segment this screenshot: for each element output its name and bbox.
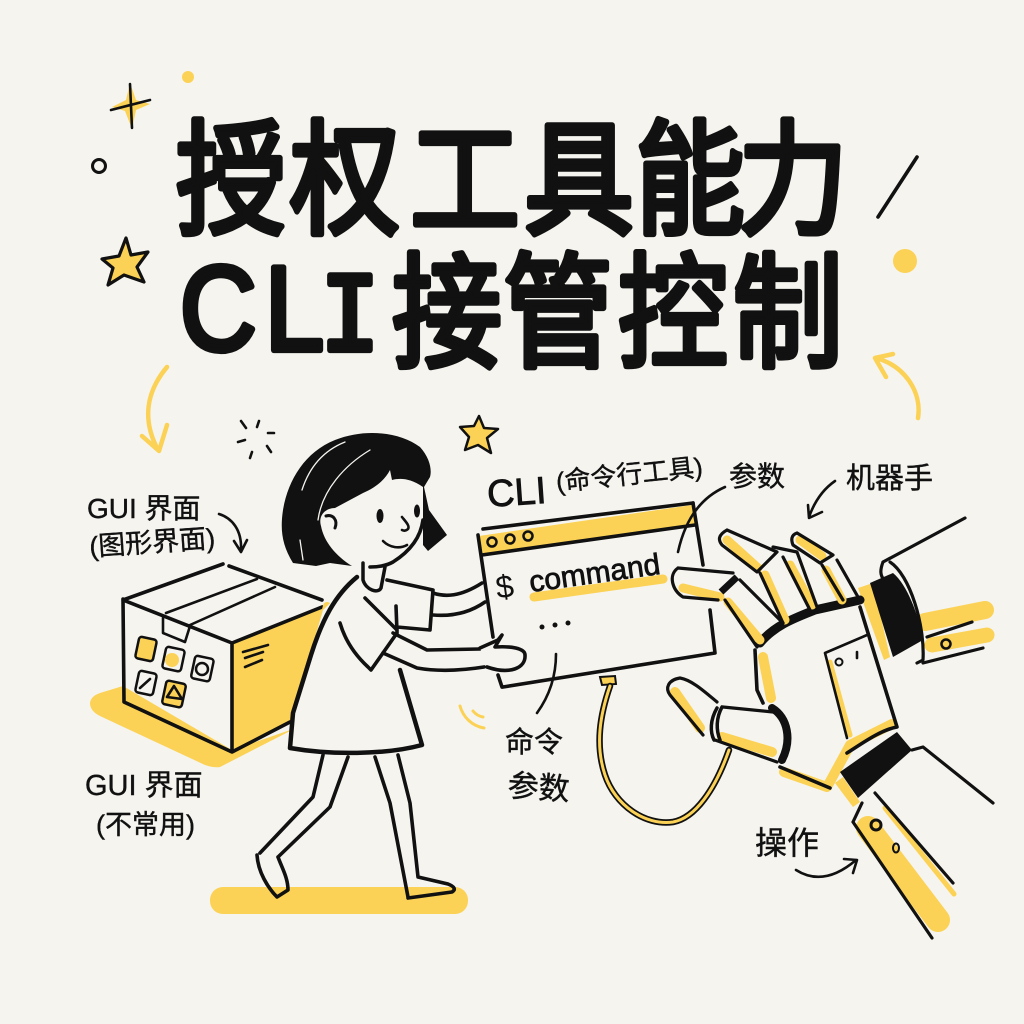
command text — [493, 547, 662, 606]
ground shadow — [210, 887, 468, 914]
label: GUI interface rarely used: GUI 界面 — [85, 770, 203, 802]
leader: command — [537, 654, 556, 713]
title line 2 — [180, 242, 843, 385]
label: GUI interface rarely used — [85, 770, 203, 840]
label: GUI interface top — [87, 493, 216, 562]
command text: $ — [493, 568, 516, 606]
arrow: yellow curved left — [142, 367, 167, 451]
label: CLI command line tool: CLI — [486, 470, 548, 516]
title line 2: 接管控制 — [392, 245, 843, 383]
title line 2: I — [320, 257, 380, 385]
face — [326, 504, 423, 567]
box: GUI app package — [90, 564, 327, 767]
icon: sparks — [238, 421, 274, 458]
box right face — [232, 605, 327, 752]
dress yellow edge — [296, 606, 327, 722]
palm — [755, 607, 897, 788]
icon: small ring — [92, 160, 106, 172]
motion marks — [460, 706, 484, 728]
label: command parameters — [505, 726, 571, 807]
icon: star left — [102, 238, 148, 285]
title bar — [479, 505, 697, 555]
app icons — [135, 636, 214, 708]
label: GUI interface top: GUI 界面 — [87, 493, 201, 524]
arrow: operate — [796, 859, 857, 877]
title line 1: 授权工具能力 — [176, 112, 848, 250]
terminal body — [478, 503, 715, 687]
label: command parameters: 参数 — [507, 768, 571, 807]
thumb — [668, 678, 787, 763]
arrow: robot hand — [808, 481, 835, 518]
hair highlights — [300, 442, 370, 560]
girl lower arm and hand — [383, 633, 525, 672]
title line 2: CL — [180, 242, 324, 376]
icon: yellow dot right — [893, 249, 917, 273]
connector — [600, 676, 616, 685]
upper arm — [433, 583, 485, 615]
upper sleeve — [858, 518, 987, 663]
cable — [600, 686, 729, 822]
command highlight — [534, 579, 663, 597]
icon: sparkle top left — [111, 83, 150, 129]
title — [176, 112, 848, 385]
label: parameters top: 参数 — [729, 461, 785, 492]
label: command parameters: 命令 — [505, 726, 563, 759]
CLI terminal window — [478, 503, 715, 687]
label: GUI interface top: (图形界面) — [88, 523, 216, 562]
icon: yellow dot — [182, 71, 194, 83]
neck — [363, 563, 385, 591]
label: CLI command line tool — [486, 452, 704, 516]
hair — [282, 433, 447, 566]
icon: star center — [460, 416, 498, 453]
dress and legs — [257, 577, 454, 898]
fingers — [672, 530, 858, 647]
arrow: yellow curved right — [875, 354, 919, 418]
knuckles — [760, 600, 860, 643]
arrow: to box — [219, 514, 247, 552]
icon: slash — [878, 157, 917, 217]
girl character — [257, 433, 485, 898]
lower sleeve — [835, 732, 993, 938]
label: CLI command line tool: (命令行工具) — [554, 452, 704, 497]
leader: parameters — [678, 487, 725, 552]
label: operate: 操作 — [755, 825, 819, 861]
box shadow — [90, 686, 296, 767]
ellipsis — [540, 620, 570, 630]
robot hand — [668, 518, 993, 938]
label: robot hand: 机器手 — [846, 462, 933, 495]
label: GUI interface rarely used: (不常用) — [96, 810, 195, 840]
command text: command — [527, 548, 662, 599]
